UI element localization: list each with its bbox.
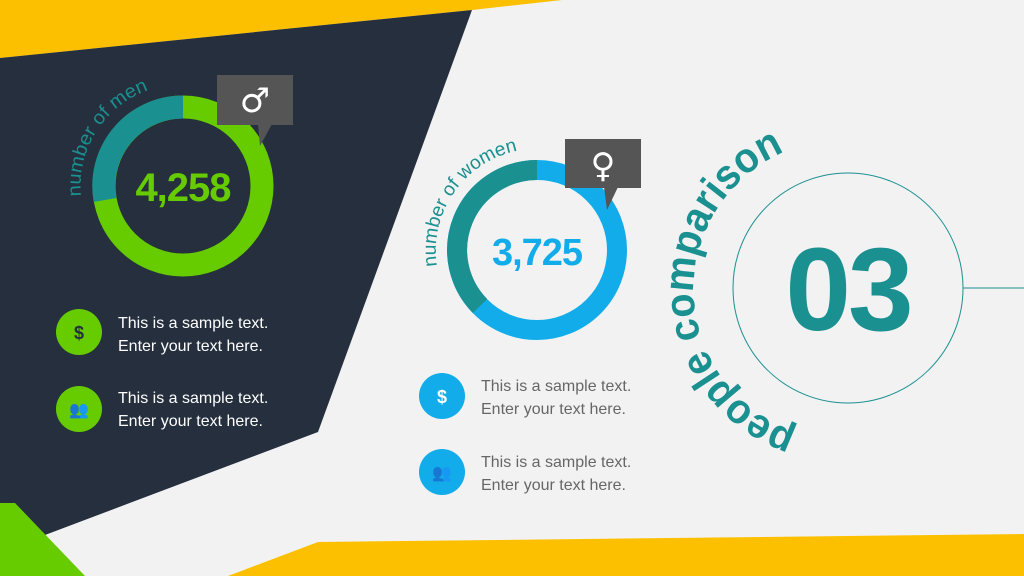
background: green corner (0, 503, 85, 576)
men bullet 1: This is a sample text. (118, 315, 268, 332)
section number circle (733, 173, 1024, 403)
men bullet 2: This is a sample text. (118, 390, 268, 407)
callout: male symbol (217, 75, 293, 146)
donut: women (457, 170, 617, 330)
background: yellow top band (0, 0, 562, 58)
women bullet 2: Enter your text here. (481, 477, 626, 494)
background: dark panel (0, 10, 472, 535)
men bullet 2: 👥 (69, 402, 89, 419)
women bullet 2 (419, 449, 631, 495)
men bullet 1 (56, 309, 268, 355)
curved title: people comparison: people comparison (670, 134, 797, 452)
section number circle: 03 (785, 224, 911, 356)
women bullet 1: Enter your text here. (481, 401, 626, 418)
curved label: number of men: number of men (70, 82, 148, 196)
callout: female symbol: ♀ (591, 146, 615, 186)
callout: female symbol (565, 139, 641, 210)
women bullet 2: 👥 (432, 465, 452, 482)
men bullet 1: $ (74, 323, 84, 343)
background: yellow bottom band (228, 534, 1024, 576)
men bullet 1: Enter your text here. (118, 338, 263, 355)
donut: men (104, 107, 262, 265)
callout: male symbol: ♂ (240, 81, 270, 121)
women bullet 1 (419, 373, 631, 419)
number: men: 4,258 (135, 166, 231, 210)
men bullet 2: Enter your text here. (118, 413, 263, 430)
women bullet 1: $ (437, 387, 447, 407)
men bullet 2 (56, 386, 268, 432)
women bullet 2: This is a sample text. (481, 454, 631, 471)
women bullet 1: This is a sample text. (481, 378, 631, 395)
curved label: number of women: number of women (425, 142, 516, 266)
number: women: 3,725 (492, 232, 583, 274)
